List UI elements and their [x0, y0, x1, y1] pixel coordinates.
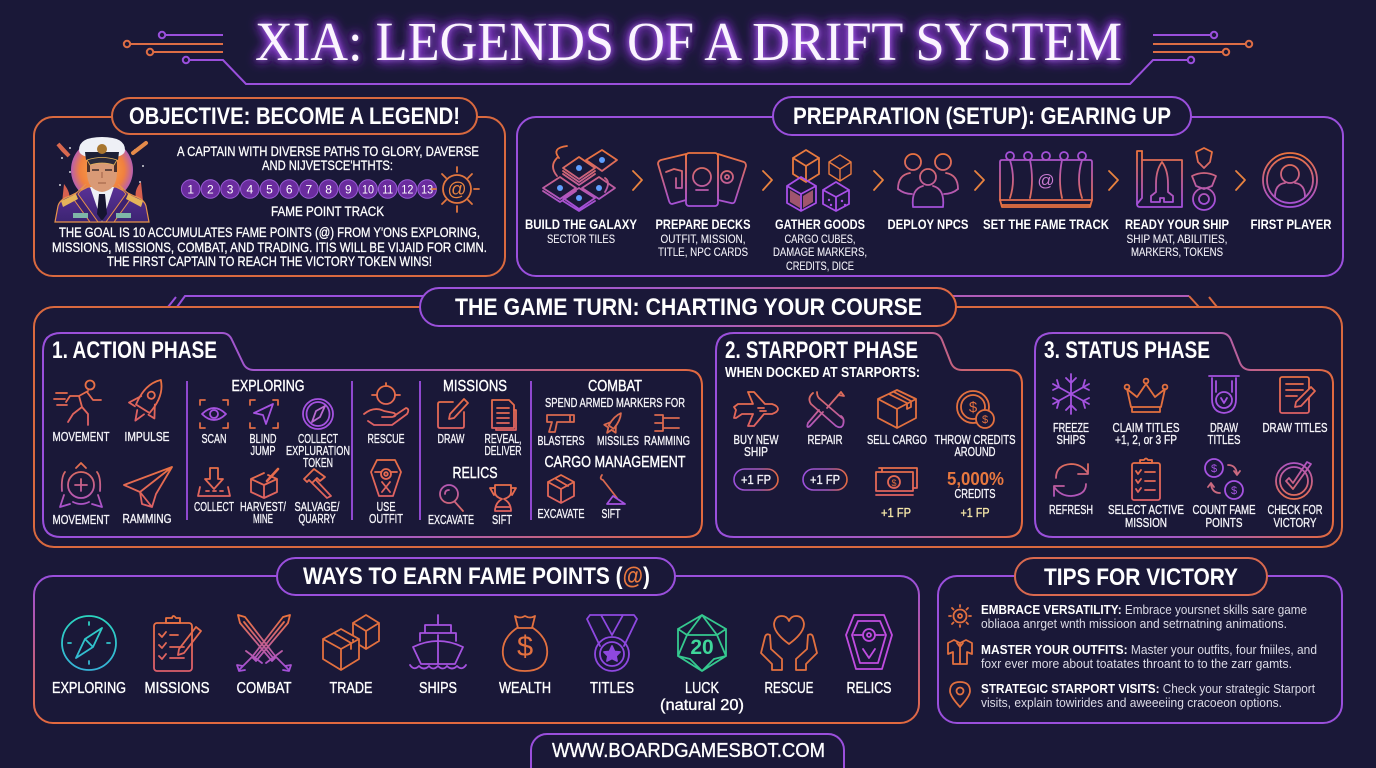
icon: map pin — [950, 682, 970, 707]
icon: medal — [587, 615, 637, 671]
status: count fame points — [1192, 459, 1256, 530]
tip: strategic starport visits — [950, 681, 1315, 710]
status: draw titles — [1262, 377, 1328, 435]
label — [369, 500, 403, 526]
sublabel: goods list: DAMAGE MARKERS, — [773, 245, 867, 259]
label: COUNT FAME — [1192, 503, 1256, 517]
icon: sift shovel — [601, 475, 625, 504]
sublabel: deck list: OUTFIT, MISSION, — [660, 232, 746, 246]
action: reveal deliver — [484, 400, 522, 458]
icon: trophy hourglass — [490, 485, 516, 511]
step: gather goods — [773, 150, 867, 273]
text: MASTER YOUR OUTFITS: Master your outfits, four fniiles, and — [981, 642, 1317, 657]
icon: rocket — [123, 372, 173, 429]
icon: compass — [62, 616, 116, 670]
title: XIA: LEGENDS OF A DRIFT SYSTEM — [255, 11, 1122, 72]
starport: throw credits around — [934, 391, 1016, 520]
way: relics — [846, 615, 892, 697]
label — [294, 500, 340, 526]
icon: pad and pencil — [438, 399, 468, 428]
heading: starport phase: 2. STARPORT PHASE — [725, 337, 918, 364]
heading: ways to earn — [277, 558, 675, 595]
label: MISSION — [1125, 516, 1167, 530]
label: +1, 2, or 3 FP — [1115, 433, 1177, 447]
label: MISSIONS — [144, 680, 210, 697]
text: foxr ever more about toatates throant to to the zarr gamts. — [981, 656, 1292, 671]
sublabel: goods list — [773, 232, 867, 273]
panel: ways to earn fame points — [34, 558, 919, 723]
icon: d20 die: 20 — [690, 636, 714, 659]
action: harvest mine — [240, 469, 286, 526]
icon: coins exchange: $ — [1211, 463, 1217, 475]
label: CHECK FOR — [1268, 503, 1322, 517]
fame point track: 5 — [266, 182, 273, 196]
label: RELICS — [846, 680, 892, 697]
text: obliaoa anrget wnth missioon and setrnatning animations. — [981, 616, 1287, 631]
action: blasters — [538, 415, 584, 448]
icon: circular arrows — [1054, 464, 1088, 496]
icon: compass token — [303, 399, 333, 429]
icon: paper plane — [124, 467, 172, 507]
action: cargo excavate — [538, 475, 584, 521]
icon: document — [492, 400, 516, 430]
text: goal description: THE FIRST CAPTAIN TO REACH THE VICTORY TOKEN WINS! — [107, 254, 432, 269]
label — [660, 680, 744, 714]
icon: coins exchange — [1205, 459, 1243, 499]
text: goal description — [52, 225, 487, 269]
label: fame point track: FAME POINT TRACK — [271, 204, 384, 219]
arrow — [1236, 171, 1245, 190]
label — [1053, 421, 1089, 447]
icon: check circle — [1276, 462, 1312, 499]
label — [1108, 503, 1184, 530]
label: RESCUE — [764, 680, 814, 697]
tip: embrace versatility — [949, 602, 1307, 631]
label: THROW CREDITS — [934, 433, 1016, 447]
way: rescue — [761, 616, 817, 697]
fame point track: 3 — [227, 182, 234, 196]
sublabel: ship items: SHIP MAT, ABILITIES, — [1126, 232, 1228, 246]
panel: tips for victory — [938, 558, 1342, 723]
label: RAMMING — [644, 434, 690, 448]
icon: medallion — [1209, 376, 1239, 413]
icon: galaxy tiles — [543, 146, 617, 211]
icon: ship mat and tokens — [1137, 148, 1216, 210]
label: MINE — [253, 512, 273, 526]
label: TOKEN — [303, 456, 333, 470]
starport: repair — [803, 392, 847, 490]
label: TRADE — [330, 680, 372, 697]
value: 5,000% credits: +1 FP — [960, 506, 990, 520]
label: WEALTH — [499, 680, 551, 697]
arrow — [975, 171, 984, 190]
label: SIFT — [492, 513, 512, 527]
label: EXPLORING — [52, 680, 126, 697]
heading: tips: TIPS FOR VICTORY — [1044, 564, 1238, 591]
label: REFRESH — [1049, 503, 1093, 517]
icon: blaster — [547, 415, 574, 432]
icon: snowflake — [1053, 374, 1089, 414]
icon: cursor in frame — [250, 400, 278, 428]
action: collect — [194, 468, 234, 514]
illustration: captain portrait — [55, 137, 149, 222]
icon: crossed swords — [237, 615, 291, 671]
action: sift — [490, 485, 516, 527]
label: +1 FP: +1 FP — [881, 506, 911, 520]
icon: cardboard box — [878, 390, 916, 428]
label: EXPLURATION — [286, 444, 350, 458]
icon: clipboard and pencil — [154, 616, 201, 671]
label: COMBAT — [236, 680, 292, 697]
label: COLLECT — [298, 432, 338, 446]
action: draw — [438, 399, 468, 446]
label: SHIP — [744, 445, 768, 459]
label: CLAIM TITLES — [1112, 421, 1180, 435]
text — [981, 642, 1317, 671]
way: exploring — [52, 616, 126, 697]
label: JUMP — [250, 444, 276, 458]
label: SHIPS — [419, 680, 457, 697]
status: freeze ships — [1053, 374, 1089, 447]
text: intro: AND NIJVETSCE'HTHTS: — [262, 158, 393, 173]
icon: eye in frame — [200, 400, 228, 428]
action: movement — [52, 380, 110, 444]
status: claim titles — [1112, 379, 1180, 447]
text: EMBRACE VERSATILITY: Embrace yoursnet skills sare game — [981, 602, 1307, 617]
text: goal description: MISSIONS, MISSIONS, COMBAT, AND TRADING. ITIS WILL BE VIJAID FOR CIMN. — [52, 240, 487, 255]
status: draw titles medallion — [1208, 376, 1240, 447]
status: check for victory — [1268, 462, 1322, 530]
label: DELIVER — [484, 444, 522, 458]
action: rescue — [364, 383, 408, 446]
heading: exploring: EXPLORING — [232, 378, 304, 395]
text: intro — [177, 144, 479, 173]
value: 5,000% credits: CREDITS — [954, 487, 996, 501]
label: RAMMING — [122, 512, 172, 526]
text: intro: A CAPTAIN WITH DIVERSE PATHS TO GLORY, DAVERSE — [177, 144, 479, 159]
value: 5,000% credits — [947, 469, 1004, 520]
step: build the galaxy — [525, 146, 638, 246]
heading: combat: SPEND ARMED MARKERS FOR — [545, 396, 685, 410]
icon: cards — [658, 153, 746, 206]
fame point track: 1 — [187, 182, 194, 196]
icon: relic — [846, 615, 892, 669]
value: 5,000% credits: 5,000% — [947, 469, 1004, 489]
icon: down arrow tray — [198, 468, 230, 496]
text — [981, 681, 1315, 710]
label: TITLES — [1208, 433, 1240, 447]
label: gather goods: GATHER GOODS — [775, 216, 865, 232]
arrow — [763, 171, 772, 190]
arrow — [1109, 171, 1118, 190]
label: BLASTERS — [538, 434, 584, 448]
icon: ship on waves — [410, 615, 466, 668]
label: DRAW TITLES — [1262, 421, 1328, 435]
action: collect exploration token — [286, 399, 350, 470]
label: SELL CARGO — [867, 433, 927, 447]
label: QUARRY — [298, 512, 336, 526]
label — [286, 432, 350, 470]
fame point track: 12 — [401, 182, 414, 196]
step: first player — [1250, 153, 1332, 232]
icon: running figure — [54, 380, 101, 425]
way: wealth — [499, 616, 551, 697]
heading: tips — [1015, 558, 1267, 595]
heading: starport phase: WHEN DOCKED AT STARPORTS: — [725, 364, 920, 381]
label: FREEZE — [1053, 421, 1089, 435]
text: STRATEGIC STARPORT VISITS: Check your strategic Starport — [981, 681, 1315, 696]
label: VICTORY — [1274, 516, 1317, 530]
fame point track: 10 — [362, 182, 374, 196]
fame point track: 6 — [286, 182, 293, 196]
label: USE — [376, 500, 396, 514]
heading: cargo management: CARGO MANAGEMENT — [544, 454, 686, 471]
action: movement alternate — [52, 463, 110, 527]
icon: coins exchange: $ — [1231, 485, 1237, 497]
arrow — [633, 171, 642, 190]
label: set the fame track: SET THE FAME TRACK — [983, 216, 1109, 232]
icon: shirt — [948, 640, 972, 664]
label: SIFT — [602, 507, 621, 521]
step: ready your ship — [1125, 148, 1229, 259]
heading: status phase: 3. STATUS PHASE — [1044, 337, 1210, 364]
label: DRAW — [438, 432, 465, 446]
action: scan — [200, 400, 228, 446]
label — [250, 432, 276, 458]
label: BLIND — [250, 432, 276, 446]
badge: +1 FP: +1 FP — [741, 473, 771, 487]
heading: combat: COMBAT — [588, 378, 642, 395]
heading: starport phase — [725, 337, 920, 381]
text — [981, 602, 1307, 631]
action: cargo sift — [601, 475, 625, 521]
label: POINTS — [1206, 516, 1242, 530]
label — [734, 433, 779, 459]
label: SELECT ACTIVE — [1108, 503, 1184, 517]
status: refresh — [1049, 464, 1093, 517]
starport: buy new ship — [734, 392, 779, 490]
icon: cube — [548, 475, 574, 503]
label: (natural 20) — [660, 697, 744, 714]
sublabel: goods list: CARGO CUBES, — [784, 232, 856, 246]
sublabel: goods list: CREDITS, DICE — [786, 259, 854, 273]
action: ramming — [122, 467, 172, 526]
icon: fame token: @ — [447, 180, 467, 200]
icon: hand holding token — [364, 383, 408, 425]
panel: preparation — [517, 97, 1343, 276]
step: deploy npcs — [888, 154, 968, 232]
heading: preparation: PREPARATION (SETUP): GEARING UP — [793, 103, 1171, 130]
action: excavate — [428, 485, 474, 527]
icon: ram prongs — [655, 415, 679, 431]
badge: +1 FP: +1 FP — [810, 473, 840, 487]
heading: ways to earn: WAYS TO EARN FAME POINTS (@) — [303, 563, 650, 590]
label: SCAN — [202, 432, 226, 446]
label: DRAW — [1210, 421, 1238, 435]
icon: wrench and screwdriver — [807, 392, 844, 427]
sublabel: ship items: MARKERS, TOKENS — [1131, 245, 1223, 259]
icon: compass with arrows — [60, 463, 102, 507]
text: goal description: THE GOAL IS 10 ACCUMULATES FAME POINTS (@) FROM Y'ONS EXPLORING, — [59, 225, 480, 240]
sublabel: deck list — [658, 232, 748, 259]
label: build the galaxy: BUILD THE GALAXY — [525, 216, 638, 232]
icon: player badge — [1263, 153, 1317, 207]
sublabel: deck list: TITLE, NPC CARDS — [658, 245, 748, 259]
text: visits, explain towirides and aweeeiing cracoeon options. — [981, 695, 1282, 710]
label: EXCAVATE — [538, 507, 584, 521]
panel: status phase — [1035, 333, 1333, 537]
panel: game turn — [34, 288, 1342, 547]
icon: missile — [601, 409, 627, 437]
action: salvage quarry — [294, 469, 340, 526]
label: OUTFIT — [369, 512, 403, 526]
icon: crown — [1125, 379, 1167, 412]
label: IMPULSE — [124, 430, 170, 444]
icon: outfit relic — [371, 460, 401, 496]
heading: objective: OBJECTIVE: BECOME A LEGEND! — [129, 103, 460, 130]
label: REPAIR — [808, 433, 842, 447]
icon: clipboard — [1132, 458, 1160, 500]
label — [1208, 421, 1240, 447]
way: luck — [660, 615, 744, 714]
icon: sun — [949, 605, 971, 627]
fame point track: 4 — [246, 182, 253, 196]
action: blind jump — [250, 400, 278, 458]
label: BUY NEW — [734, 433, 779, 447]
action: impulse — [123, 372, 173, 444]
heading: combat — [545, 378, 685, 410]
fame point track: 7 — [306, 182, 313, 196]
starport: sell cargo — [867, 390, 927, 520]
icon: money bag: $ — [517, 631, 533, 663]
icon: magnifier — [440, 485, 463, 511]
label: AROUND — [954, 445, 996, 459]
label: EXCAVATE — [428, 513, 474, 527]
label: SHIPS — [1056, 433, 1086, 447]
label: TITLES — [590, 680, 634, 697]
step: prepare decks — [656, 153, 750, 259]
icon: hands and heart — [761, 616, 817, 670]
fame point track — [181, 167, 479, 219]
action: use outfit — [369, 460, 403, 526]
icon: coins — [957, 391, 994, 428]
panel: action phase — [43, 333, 702, 537]
icon: coins: $ — [969, 399, 978, 416]
fame point track: 13 — [421, 182, 433, 196]
label — [1268, 503, 1322, 530]
heading: preparation — [773, 97, 1191, 135]
icon: coins: $ — [982, 414, 988, 426]
icon: group of people — [898, 154, 958, 207]
icon: ship — [734, 392, 778, 426]
status: select active mission — [1108, 458, 1184, 530]
icon: fame track board: @ — [1037, 171, 1055, 190]
title decoration: right circuit — [1153, 32, 1252, 63]
label — [240, 500, 286, 526]
panel: starport phase — [716, 333, 1022, 537]
label: first player: FIRST PLAYER — [1250, 216, 1332, 232]
icon: cubes and dice — [787, 150, 851, 211]
fame point track: 9 — [345, 182, 352, 196]
label — [1112, 421, 1180, 447]
label: MISSILES — [597, 434, 639, 448]
label: prepare decks: PREPARE DECKS — [656, 216, 750, 232]
fame point track: 2 — [207, 182, 214, 196]
heading: missions: MISSIONS — [443, 378, 507, 395]
label — [484, 432, 522, 458]
icon: crate and pick — [251, 469, 278, 498]
icon: note and pencil — [1280, 377, 1315, 413]
heading: game turn: THE GAME TURN: CHARTING YOUR COURSE — [455, 294, 922, 321]
heading: action phase: 1. ACTION PHASE — [52, 337, 217, 364]
step: set the fame track — [983, 152, 1109, 232]
label: COLLECT — [194, 500, 234, 514]
footer: website: WWW.BOARDGAMESBOT.COM — [552, 740, 825, 762]
way: titles — [587, 615, 637, 697]
label — [934, 433, 1016, 459]
arrow — [874, 171, 883, 190]
sublabel: ship items — [1126, 232, 1228, 259]
footer: website — [531, 734, 844, 768]
icon: hammer — [304, 469, 331, 498]
sublabel: sector tiles: SECTOR TILES — [547, 232, 615, 246]
heading: relics: RELICS — [452, 465, 498, 482]
label: deploy npcs: DEPLOY NPCS — [888, 216, 968, 232]
tip: master your outfits — [948, 640, 1317, 671]
way: trade — [323, 615, 379, 697]
label: HARVEST/ — [240, 500, 286, 514]
fame point track: 8 — [325, 182, 332, 196]
action: ramming combat — [644, 415, 690, 448]
icon: fame token — [432, 167, 479, 212]
label: ready your ship: READY YOUR SHIP — [1125, 216, 1229, 232]
fame point track: 11 — [382, 182, 393, 196]
heading: game turn — [420, 288, 956, 326]
label: LUCK — [685, 680, 720, 697]
label: RESCUE — [368, 432, 404, 446]
label — [1192, 503, 1256, 530]
way: combat — [236, 615, 292, 697]
icon: crates — [323, 615, 379, 670]
title decoration: left circuit — [124, 32, 1187, 84]
panel: objective — [34, 98, 505, 276]
heading: objective — [112, 98, 477, 134]
way: ships — [410, 615, 466, 697]
way: missions — [144, 616, 210, 697]
label: MOVEMENT — [52, 513, 110, 527]
label: REVEAL, — [484, 432, 522, 446]
action: missiles — [597, 409, 639, 448]
label: MOVEMENT — [52, 430, 110, 444]
label: SALVAGE/ — [294, 500, 340, 514]
icon: cash stack: $ — [891, 478, 897, 488]
